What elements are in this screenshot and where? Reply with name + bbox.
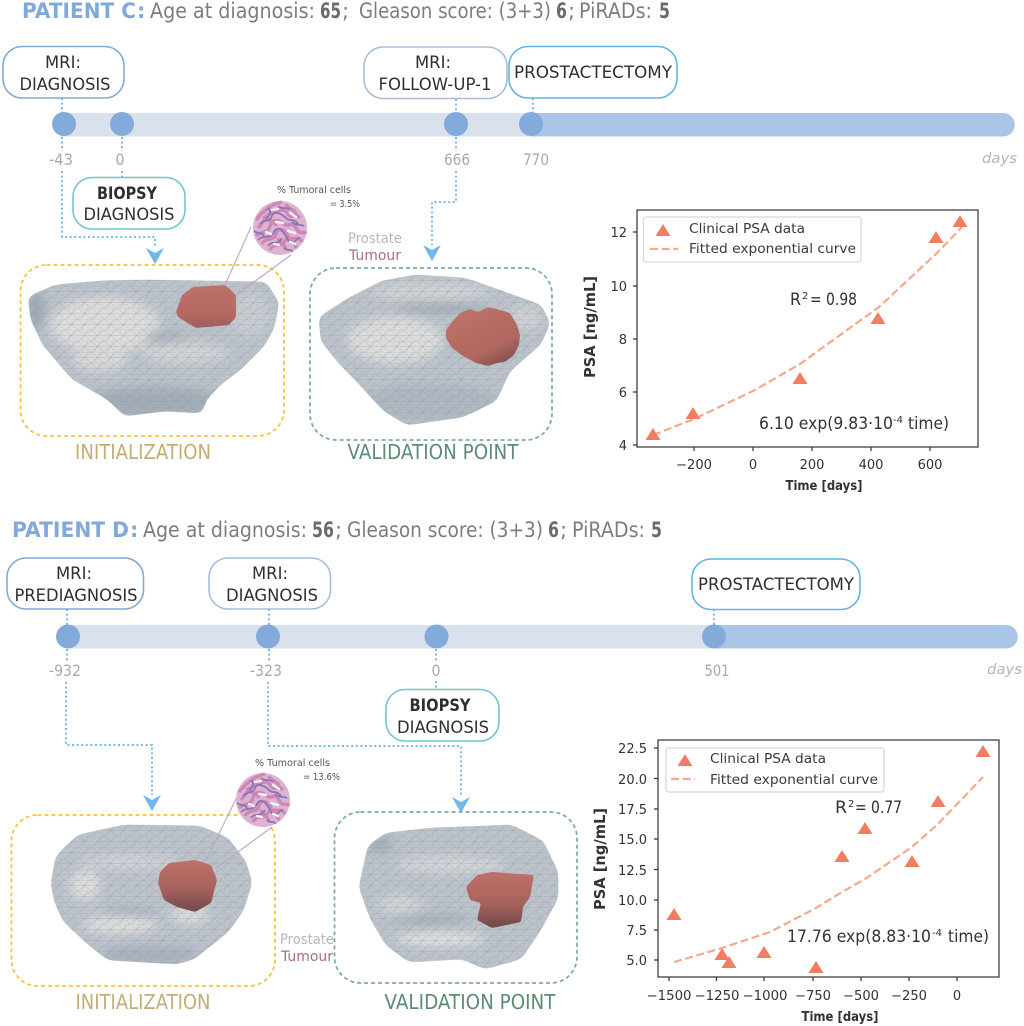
tumour at initialization <box>176 285 236 328</box>
axis ticks <box>633 232 930 451</box>
label: prostate tumour: Prostate <box>280 932 334 948</box>
tumoral cell label: = 13.6% <box>303 772 340 783</box>
axis ticks <box>654 748 957 981</box>
callout: prostatectomy <box>692 559 860 610</box>
legend <box>644 217 861 262</box>
callout: biopsy <box>73 178 185 229</box>
x tick labels <box>646 989 961 1004</box>
x tick labels: 0 <box>953 989 961 1004</box>
callout: MRI follow-up: MRI: <box>415 53 451 73</box>
callout: MRI prediagnosis <box>7 558 144 609</box>
label: validation point: VALIDATION POINT <box>348 440 519 464</box>
y tick labels: 4 <box>619 439 627 454</box>
data points <box>666 745 990 973</box>
tumoral cell label <box>255 758 340 783</box>
annotation: R squared <box>790 290 857 310</box>
y tick labels: 12 <box>610 226 627 241</box>
heading: patient D: ; <box>335 518 342 542</box>
annotation: R squared: = 0.98 <box>810 290 857 310</box>
tumour at validation <box>466 872 534 928</box>
panel: patient D <box>7 518 1022 1025</box>
legend: Clinical PSA data <box>710 752 826 767</box>
timeline: patient C: days <box>982 151 1017 167</box>
tumour at validation <box>446 307 520 366</box>
callout: MRI diagnosis: DIAGNOSIS <box>20 75 110 95</box>
legend <box>666 748 884 792</box>
timeline: patient C <box>49 112 1017 169</box>
annotation: R squared <box>835 798 902 818</box>
x tick labels: −750 <box>795 989 831 1004</box>
legend: Fitted exponential curve <box>689 242 856 257</box>
annotation: R squared: 2 <box>848 799 854 810</box>
annotation: equation: 6.10 exp(9.83·10 <box>759 414 893 434</box>
x tick labels <box>676 458 942 473</box>
panel: validation point <box>334 812 577 1014</box>
chart: PSA patient D <box>591 740 999 1025</box>
x tick labels: 0 <box>749 458 757 473</box>
timeline: patient C: -43 <box>49 150 73 169</box>
x tick labels: −1250 <box>694 989 740 1004</box>
y tick labels <box>610 226 627 454</box>
y tick labels: 6 <box>619 386 627 401</box>
histology inset <box>225 201 307 295</box>
x axis label: Time [days] <box>786 479 862 494</box>
mesh: prostate at initialization <box>25 275 285 420</box>
timeline: patient D <box>49 624 1022 680</box>
label: validation point: VALIDATION POINT <box>384 990 556 1014</box>
tumoral cell label: = 3.5% <box>330 199 360 210</box>
callout: MRI diagnosis: MRI: <box>252 564 288 584</box>
y tick labels: 22.5 <box>618 742 647 757</box>
timeline: patient C: 0 <box>116 150 124 169</box>
callout: biopsy <box>386 690 499 741</box>
y tick labels: 10 <box>610 280 627 295</box>
callout: biopsy: BIOPSY <box>410 696 471 716</box>
legend: Fitted exponential curve <box>710 773 878 788</box>
callout: biopsy: DIAGNOSIS <box>84 205 174 225</box>
mesh: prostate at initialization <box>51 824 252 964</box>
tumoral cell label: % Tumoral cells <box>255 758 330 769</box>
mesh: prostate at validation <box>359 824 558 968</box>
histology inset <box>205 773 290 868</box>
heading: patient D: 56 <box>312 518 334 542</box>
callout: prostatectomy: PROSTACTECTOMY <box>698 575 855 595</box>
annotation: R squared: 2 <box>802 291 808 302</box>
heading: patient D: ; <box>560 518 567 542</box>
label: prostate tumour <box>280 932 334 965</box>
x tick labels: −200 <box>676 458 712 473</box>
y tick labels: 5.0 <box>626 954 647 969</box>
heading: patient C <box>22 0 670 23</box>
label: prostate tumour: Tumour <box>348 248 401 264</box>
callout: MRI follow-up: FOLLOW-UP-1 <box>378 75 492 95</box>
annotation: equation: time) <box>948 927 989 947</box>
annotation: R squared: R <box>790 290 801 310</box>
callout: biopsy: BIOPSY <box>97 184 158 204</box>
x tick labels: −1000 <box>742 989 788 1004</box>
legend: Clinical PSA data <box>689 222 805 237</box>
heading: patient D: PiRADs: <box>572 518 645 542</box>
connectors: patient C <box>62 98 533 264</box>
callout: prostatectomy <box>509 46 677 98</box>
heading: patient D: Age at diagnosis: <box>143 518 307 542</box>
y tick labels: 12.5 <box>618 864 647 879</box>
label: initialization: INITIALIZATION <box>76 990 210 1014</box>
annotation: R squared: R <box>835 798 847 818</box>
chart: PSA patient C <box>581 210 978 494</box>
tumoral cell label <box>277 185 360 210</box>
label: initialization: INITIALIZATION <box>75 440 211 464</box>
y tick labels: 10.0 <box>618 894 647 909</box>
timeline: patient C: 770 <box>523 150 549 169</box>
callout: biopsy: DIAGNOSIS <box>397 718 489 738</box>
x axis label: Time [days] <box>802 1010 878 1025</box>
panel: initialization <box>20 185 360 464</box>
data points <box>646 215 968 440</box>
x tick labels: 400 <box>859 458 883 473</box>
callout: MRI prediagnosis: MRI: <box>56 564 92 584</box>
tumour at initialization <box>158 860 217 912</box>
mesh: prostate at validation <box>315 270 555 430</box>
heading: patient D: Gleason score: (3+3) <box>347 518 543 542</box>
x tick labels: −250 <box>891 989 927 1004</box>
timeline: patient D: 0 <box>432 661 440 680</box>
panel: patient C <box>3 0 1017 494</box>
annotation: R squared: = 0.77 <box>855 798 902 818</box>
label: prostate tumour: Prostate <box>348 231 402 247</box>
callout: MRI diagnosis: MRI: <box>45 53 81 73</box>
callout: MRI diagnosis <box>209 558 330 609</box>
fitted curve <box>653 227 962 435</box>
y tick labels: 7.5 <box>626 924 647 939</box>
label: prostate tumour: Tumour <box>280 949 333 965</box>
callout: MRI diagnosis: DIAGNOSIS <box>226 586 318 606</box>
heading: patient D: : <box>130 518 138 542</box>
y axis label: PSA [ng/mL] <box>591 808 609 910</box>
heading: patient D: PATIENT D <box>12 518 129 542</box>
x tick labels: −1500 <box>646 989 692 1004</box>
fitted curve <box>674 777 983 962</box>
x tick labels: −500 <box>843 989 879 1004</box>
y tick labels: 17.5 <box>618 803 647 818</box>
x tick labels: 600 <box>918 458 942 473</box>
annotation: equation: 17.76 exp(8.83·10 <box>787 927 931 947</box>
tumoral cell label: % Tumoral cells <box>277 185 351 196</box>
callout: MRI diagnosis <box>3 46 124 98</box>
annotation: equation: -4 <box>893 415 903 426</box>
x tick labels: 200 <box>800 458 824 473</box>
panel: initialization <box>12 758 340 1014</box>
timeline: patient D: 501 <box>704 661 730 680</box>
heading: patient D <box>12 518 662 542</box>
y tick labels: 8 <box>619 333 627 348</box>
timeline: patient D: -932 <box>49 661 81 680</box>
callout: prostatectomy: PROSTACTECTOMY <box>514 63 673 83</box>
y axis label: PSA [ng/mL] <box>581 276 599 378</box>
annotation: equation: -4 <box>932 928 942 939</box>
timeline: patient D: -323 <box>250 661 282 680</box>
y tick labels: 20.0 <box>618 773 647 788</box>
y tick labels: 15.0 <box>618 833 647 848</box>
timeline: patient C: 666 <box>444 150 470 169</box>
annotation: equation: time) <box>908 414 949 434</box>
heading: patient D: 6 <box>548 518 559 542</box>
panel: validation point <box>310 231 555 464</box>
label: prostate tumour <box>348 231 402 264</box>
timeline: patient D: days <box>987 662 1022 678</box>
callout: MRI follow-up <box>364 47 507 98</box>
heading: patient D: 5 <box>651 518 662 542</box>
connectors: patient D <box>66 609 714 813</box>
callout: MRI prediagnosis: PREDIAGNOSIS <box>14 586 138 606</box>
y tick labels <box>618 742 647 969</box>
